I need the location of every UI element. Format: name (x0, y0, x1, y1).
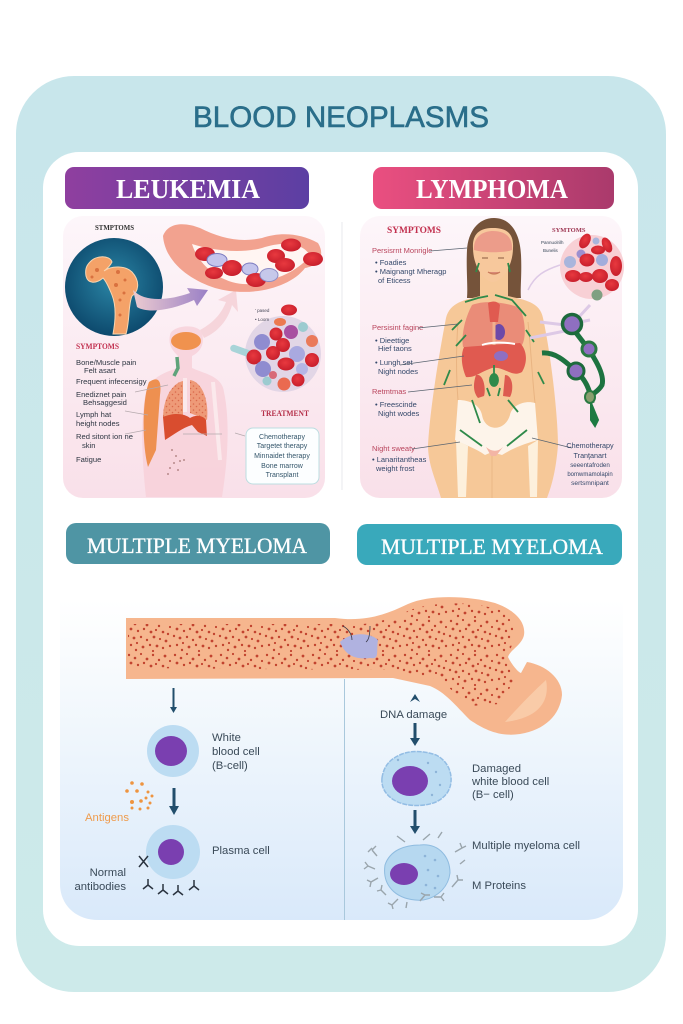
label: damaged cell: Damaged (472, 763, 521, 775)
label: normal antibodies: antibodies (74, 881, 126, 893)
leader lines (400, 248, 572, 449)
figure: female body (428, 218, 558, 498)
organs (462, 302, 526, 398)
icon: lymph chain (542, 314, 603, 426)
panel: leukemia (63, 216, 325, 498)
text: symptoms list: Fatigue (76, 455, 101, 464)
icon: lesion (340, 626, 378, 658)
pale arrow from body (200, 290, 238, 338)
heading: leukemia (65, 167, 309, 209)
text: symptoms labels: Night wodes (378, 409, 420, 418)
heading: multiple myeloma right (357, 524, 622, 565)
icon: M proteins (364, 832, 466, 909)
callout: treatment list: Transplant (266, 472, 298, 479)
label: white blood cell: White (212, 732, 241, 744)
text: symptoms labels: Persisint fagine (372, 323, 423, 332)
text: symptoms labels: • Foadies (375, 258, 407, 267)
title: BLOOD NEOPLASMS (193, 101, 489, 134)
callout: treatment list: Minnaidet therapy (254, 453, 310, 460)
heading: multiple myeloma right: MULTIPLE MYELOMA (381, 534, 603, 559)
text: symptoms list: skin (82, 441, 96, 450)
icon: antigens (125, 781, 154, 810)
label: treatment: TREATMENT (261, 409, 310, 418)
text: treatment: Tranţanart (574, 451, 606, 460)
text: symptoms list: Felt asart (84, 366, 117, 375)
callout: treatment list: Targetet therapy (257, 443, 308, 450)
icon: cell circle: SYMTOMS (552, 227, 586, 234)
body silhouette (142, 326, 228, 497)
text: symptoms labels: weight frost (375, 464, 415, 473)
inner white card (43, 152, 638, 946)
small dots in abdomen (167, 449, 185, 475)
cell: multiple myeloma (385, 845, 450, 900)
icon: blood cell circle (229, 304, 321, 392)
text: treatment (566, 441, 614, 487)
text: symptoms list (76, 342, 147, 464)
text: symptoms list: SYMPTOMS (76, 342, 120, 351)
label: antigens: Antigens (85, 812, 129, 824)
leader lines (125, 385, 245, 436)
text: symptoms list: Red sitont ion ne (76, 432, 133, 441)
callout: treatment list (246, 428, 319, 484)
text: symptoms list: Enediznet pain (76, 390, 126, 399)
text: symptoms list: Lymph hat (76, 410, 112, 419)
heading: multiple myeloma left: MULTIPLE MYELOMA (87, 533, 307, 558)
icon: blood cell circle: ' pased (255, 308, 270, 313)
text: symptoms labels: Night nodes (378, 367, 418, 376)
text: symptoms list: Bone/Muscle pain (76, 358, 136, 367)
text: treatment: sertsmnipant (571, 480, 609, 487)
text: symptoms labels: • Dieettige (375, 336, 409, 345)
text: symptoms labels: • Lanaritantheas (372, 455, 427, 464)
text: symptoms labels: • Maignangt Mheragp (375, 267, 446, 276)
icon: cell circle (541, 227, 624, 300)
arrows to nodes (528, 265, 590, 338)
arrow up (410, 694, 420, 702)
label: normal antibodies (74, 867, 126, 893)
panel divider (341, 222, 343, 490)
cell: white blood cell (147, 725, 199, 777)
text: symptoms labels: SYMPTOMS (387, 226, 441, 236)
icon: neck nodes (174, 357, 178, 376)
cell: damaged white blood cell (382, 751, 451, 806)
icon: blood cell circle: • Loom (255, 317, 269, 322)
label: plasma cell: Plasma cell (212, 845, 270, 857)
label: damaged cell (471, 763, 549, 801)
text: treatment: Chemotherapy (566, 441, 614, 450)
arrow: bone to vessel (133, 288, 208, 311)
label: white blood cell: blood cell (212, 746, 260, 758)
icon: brain (171, 332, 201, 350)
lymph network (444, 263, 544, 446)
flow: normal B-cell (74, 688, 270, 895)
text: symptoms labels: Retmtmas (372, 387, 406, 396)
label: normal antibodies: Normal (90, 867, 126, 879)
lungs and organs (144, 378, 220, 467)
text: symptoms labels: of Eticess (378, 276, 411, 285)
text: symptoms labels: Night sweaty (372, 444, 415, 453)
label: symptoms top: STMPTOMS (95, 223, 134, 232)
text: symptoms labels: Persisrnt Monrigle (372, 246, 432, 255)
icon: bone in circle (65, 238, 163, 336)
text: treatment: seeentafroden (570, 462, 610, 469)
text: symptoms labels: • Lungh set (375, 358, 414, 367)
cell: plasma cell (146, 825, 200, 879)
icon: blood vessel (163, 224, 323, 292)
arrow down (410, 810, 420, 834)
label: multiple myeloma cell: Multiple myeloma cell (472, 840, 580, 852)
text: symptoms labels (372, 226, 446, 473)
panel: myeloma lower background (60, 600, 623, 920)
label: M proteins: M Proteins (472, 880, 526, 892)
label: damaged cell: (B− cell) (472, 789, 514, 801)
callout: treatment list: Bone marrow (261, 463, 304, 470)
label: damaged cell: white blood cell (471, 776, 549, 788)
heading: lymphoma: LYMPHOMA (416, 174, 568, 204)
arrow 1 (170, 688, 177, 713)
text: symptoms list: Frequent infecensigy (76, 377, 147, 386)
icon: cell circle: Pannuolrilh (541, 240, 564, 245)
icon: antibodies (139, 856, 199, 895)
label: white blood cell: (B-cell) (212, 760, 248, 772)
illustration: femur bone (126, 597, 562, 735)
text: symptoms list: Behsaggesid (83, 398, 127, 407)
arrow 2 (169, 788, 179, 815)
text: treatment: bomwmamolapin (567, 472, 613, 478)
arrow down (410, 723, 420, 746)
divider (344, 679, 346, 920)
callout: treatment list: Chemotherapy (259, 434, 305, 441)
heading: lymphoma (373, 167, 614, 209)
text: symptoms labels: • Freescinde (375, 400, 417, 409)
panel: lymphoma (360, 216, 624, 498)
label: DNA damage: DNA damage (380, 709, 447, 721)
heading: leukemia: LEUKEMIA (116, 174, 260, 204)
flow: myeloma (364, 694, 580, 909)
text: symptoms list: height nodes (76, 419, 120, 428)
text: symptoms labels: Hief taons (378, 344, 412, 353)
icon: cell circle: Bunelis (543, 248, 559, 253)
label: white blood cell (212, 732, 260, 772)
heading: multiple myeloma left (66, 523, 330, 564)
